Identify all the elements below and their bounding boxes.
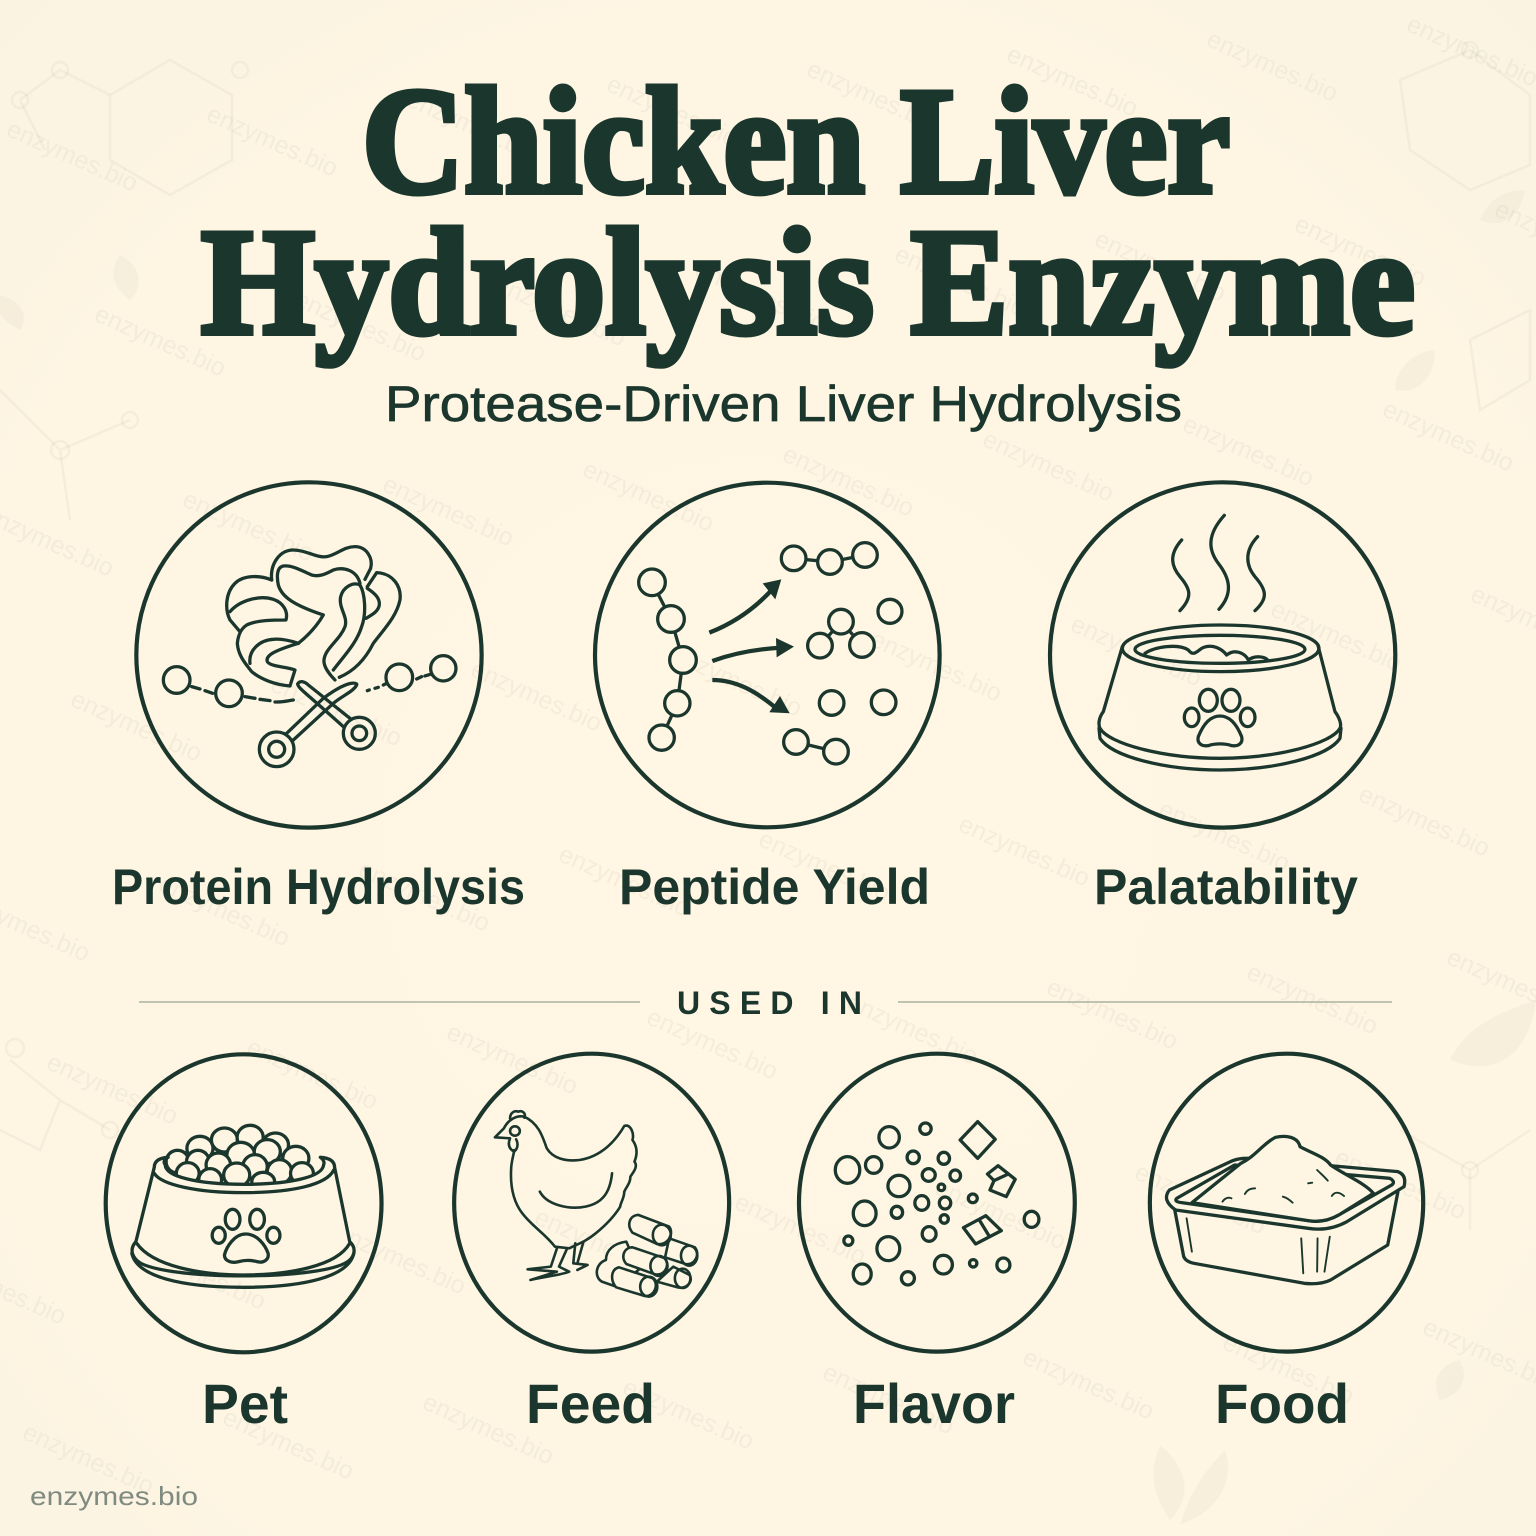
background watermark text: enzymes.bio xyxy=(291,285,430,368)
background watermark text: enzymes.bio xyxy=(619,1373,758,1456)
background watermark text: enzymes.bio xyxy=(931,1173,1070,1256)
background watermark text: enzymes.bio xyxy=(43,1048,182,1131)
background watermark text: enzymes.bio xyxy=(1331,1143,1470,1226)
background watermark text: enzymes.bio xyxy=(1155,795,1294,878)
icon: pet food bowl xyxy=(106,1054,382,1352)
background watermark text: enzymes.bio xyxy=(531,1203,670,1286)
label: protein hydrolysis: Protein Hydrolysis xyxy=(112,859,525,915)
background watermark text: enzymes.bio xyxy=(419,1388,558,1471)
background watermark text: enzymes.bio xyxy=(91,300,230,383)
icon: palatability steaming bowl xyxy=(1050,482,1395,828)
background watermark text: enzymes.bio xyxy=(1003,40,1142,123)
background watermark text: enzymes.bio xyxy=(3,115,142,198)
subtitle: Protease-Driven Liver Hydrolysis xyxy=(385,376,1182,432)
background watermark text: enzymes.bio xyxy=(555,840,694,923)
background watermark text: enzymes.bio xyxy=(1091,225,1230,308)
icon: flavor particles xyxy=(799,1054,1075,1352)
icon: peptide yield chain and arrows xyxy=(595,483,940,827)
section heading: used in: USED IN xyxy=(677,985,862,1021)
background watermark text: enzymes.bio xyxy=(691,255,830,338)
background watermark text: enzymes.bio xyxy=(331,1218,470,1301)
label: palatability: Palatability xyxy=(1094,859,1358,915)
background watermark text: enzymes.bio xyxy=(1203,25,1342,108)
background watermark text: enzymes.bio xyxy=(1219,1328,1358,1411)
background watermark text: enzymes.bio xyxy=(67,685,206,768)
background watermark text: enzymes.bio xyxy=(603,70,742,153)
label: pet: Pet xyxy=(202,1372,288,1435)
background watermark text: enzymes.bio xyxy=(867,625,1006,708)
background watermark text: enzymes.bio xyxy=(219,1403,358,1486)
background watermark text: enzymes.bio xyxy=(131,1233,270,1316)
background watermark text: enzymes.bio xyxy=(891,240,1030,323)
icon: protein hydrolysis liver and scissors xyxy=(136,482,482,828)
label: peptide yield: Peptide Yield xyxy=(619,859,930,915)
background watermark text: enzymes.bio xyxy=(803,55,942,138)
background watermark text: enzymes.bio xyxy=(843,988,982,1071)
background watermark text: enzymes.bio xyxy=(1243,958,1382,1041)
icon: food tray with powder xyxy=(1150,1054,1423,1352)
background watermark text: enzymes.bio xyxy=(955,810,1094,893)
background watermark text: enzymes.bio xyxy=(1267,595,1406,678)
title: Chicken Liver xyxy=(362,57,1230,225)
title: Hydrolysis Enzyme xyxy=(201,198,1415,366)
title xyxy=(201,57,1415,366)
background watermark text: enzymes.bio xyxy=(203,100,342,183)
background watermark text: enzymes.bio xyxy=(1043,973,1182,1056)
background watermark text: enzymes.bio xyxy=(1019,1343,1158,1426)
label: flavor: Flavor xyxy=(853,1372,1015,1435)
footer brand: enzymes.bio xyxy=(30,1481,198,1511)
background watermark text: enzymes.bio xyxy=(819,1358,958,1441)
background watermark text: enzymes.bio xyxy=(443,1018,582,1101)
background watermark text: enzymes.bio xyxy=(579,455,718,538)
background watermark text: enzymes.bio xyxy=(355,855,494,938)
background watermark text: enzymes.bio xyxy=(267,670,406,753)
background watermark text: enzymes.bio xyxy=(379,470,518,553)
background watermark text: enzymes.bio xyxy=(667,640,806,723)
background watermark text: enzymes.bio xyxy=(403,85,542,168)
background watermark text: enzymes.bio xyxy=(19,1418,158,1501)
background watermark text: enzymes.bio xyxy=(643,1003,782,1086)
background watermark text: enzymes.bio xyxy=(243,1033,382,1116)
background watermark text: enzymes.bio xyxy=(1067,610,1206,693)
label: food: Food xyxy=(1215,1372,1349,1435)
background watermark text: enzymes.bio xyxy=(467,655,606,738)
background watermark text: enzymes.bio xyxy=(491,270,630,353)
background watermark text: enzymes.bio xyxy=(1291,210,1430,293)
background watermark text: enzymes.bio xyxy=(1355,780,1494,863)
icon: chicken and feed pellets xyxy=(454,1054,729,1352)
background watermark text: enzymes.bio xyxy=(731,1188,870,1271)
background watermark text: enzymes.bio xyxy=(155,870,294,953)
label: feed: Feed xyxy=(526,1372,655,1435)
background watermark text: enzymes.bio xyxy=(1379,395,1518,478)
background watermark text: enzymes.bio xyxy=(1179,410,1318,493)
background watermark text: enzymes.bio xyxy=(779,440,918,523)
background watermark text: enzymes.bio xyxy=(755,825,894,908)
background watermark text: enzymes.bio xyxy=(179,485,318,568)
background watermark text: enzymes.bio xyxy=(1131,1158,1270,1241)
background watermark text: enzymes.bio xyxy=(979,425,1118,508)
